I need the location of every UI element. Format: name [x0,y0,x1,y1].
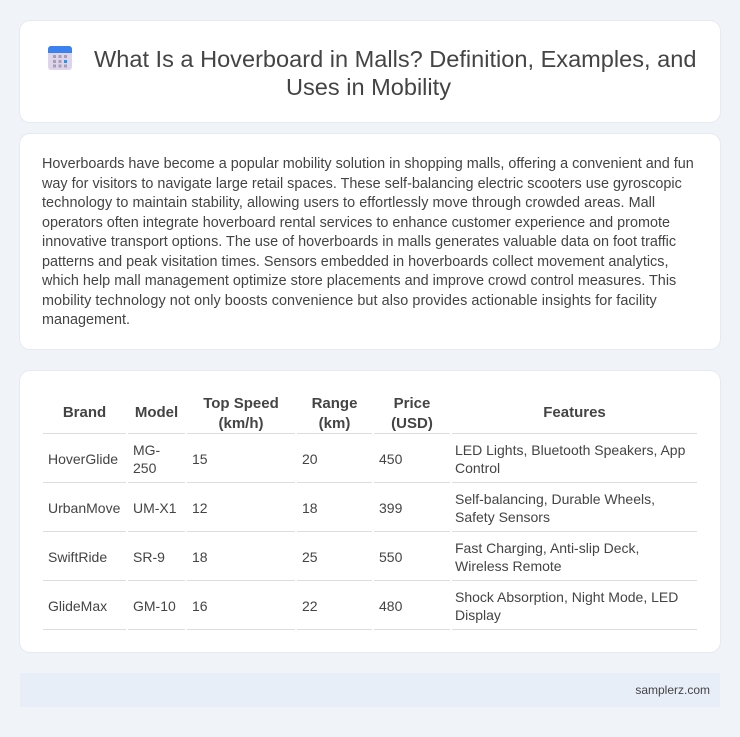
row: HoverGlide: HoverGlide [48,451,118,467]
row: GlideMax: 22 [302,598,318,614]
intro paragraph: Hoverboards have become a popular mobility solution in shopping malls, offering a convenient and fun [42,156,694,172]
row: HoverGlide: MG- [133,442,160,458]
table header: Top Speed [203,395,279,412]
intro paragraph: management. [42,312,130,328]
title card [20,21,720,122]
heading [94,46,696,100]
footer source text: samplerz.com [635,683,710,697]
intro text panel [20,134,720,349]
heading: What Is a Hoverboard in Malls? Definition, Examples, and [94,46,696,72]
row: HoverGlide: Control [455,460,500,476]
intro paragraph: technology to maintain stability, allowing users to effortlessly move through crowded areas. Mall [42,195,655,211]
row: HoverGlide: LED Lights, Bluetooth Speakers, App [455,442,685,458]
intro paragraph [42,156,694,328]
table header: (km) [319,415,350,432]
row: GlideMax: 480 [379,598,402,614]
row: GlideMax: GlideMax [48,598,107,614]
row: SwiftRide: SwiftRide [48,549,107,565]
table header: Brand [63,404,106,421]
table header: (USD) [391,415,433,432]
row: GlideMax: Display [455,607,501,623]
row: GlideMax: 16 [192,598,208,614]
row: HoverGlide: 250 [133,460,156,476]
row: UrbanMove: 18 [302,500,318,516]
row: SwiftRide: 25 [302,549,318,565]
row: GlideMax: Shock Absorption, Night Mode, LED [455,589,678,605]
row: UrbanMove [43,491,697,532]
table header: Price [394,395,430,412]
row: HoverGlide: 15 [192,451,208,467]
row: HoverGlide: 450 [379,451,402,467]
row: UrbanMove: UM-X1 [133,500,177,516]
row: UrbanMove: 399 [379,500,402,516]
intro paragraph: way for visitors to navigate large retail spaces. These self-balancing electric scooters use gyroscopic [42,176,682,192]
table header: (km/h) [218,415,264,432]
row: HoverGlide: 20 [302,451,318,467]
table header [43,395,697,434]
intro paragraph: operators often integrate hoverboard rental services to enhance customer experience and promote [42,214,670,230]
table header: Range [312,395,357,412]
row: SwiftRide [43,540,697,581]
heading: Uses in Mobility [286,74,451,100]
intro paragraph: innovative transport options. The use of hoverboards in malls generates valuable data on foot traffic [42,234,676,250]
row: SwiftRide: 18 [192,549,208,565]
row: GlideMax: GM-10 [133,598,176,614]
table header: Model [135,404,178,421]
row: UrbanMove: Self-balancing, Durable Wheels, [455,491,655,507]
row: UrbanMove: Safety Sensors [455,509,550,525]
row: GlideMax [43,589,697,630]
intro paragraph: patterns and peak visitation times. Sensors embedded in hoverboards collect movement analytics, [42,254,668,270]
row: SwiftRide: SR-9 [133,549,165,565]
icon: calendar [48,46,72,70]
footer bar [20,673,720,707]
row: SwiftRide: Wireless Remote [455,558,562,574]
table header: Features [543,404,606,421]
comparison table panel [20,371,720,652]
row: SwiftRide: Fast Charging, Anti-slip Deck, [455,540,639,556]
row: UrbanMove: UrbanMove [48,500,120,516]
row: UrbanMove: 12 [192,500,208,516]
intro paragraph: mobility technology not only boosts convenience but also provides actionable insights for facility [42,292,657,308]
intro paragraph: which help mall management optimize store placements and improve crowd control measures. This [42,273,676,289]
row: HoverGlide [43,442,697,483]
row: SwiftRide: 550 [379,549,402,565]
